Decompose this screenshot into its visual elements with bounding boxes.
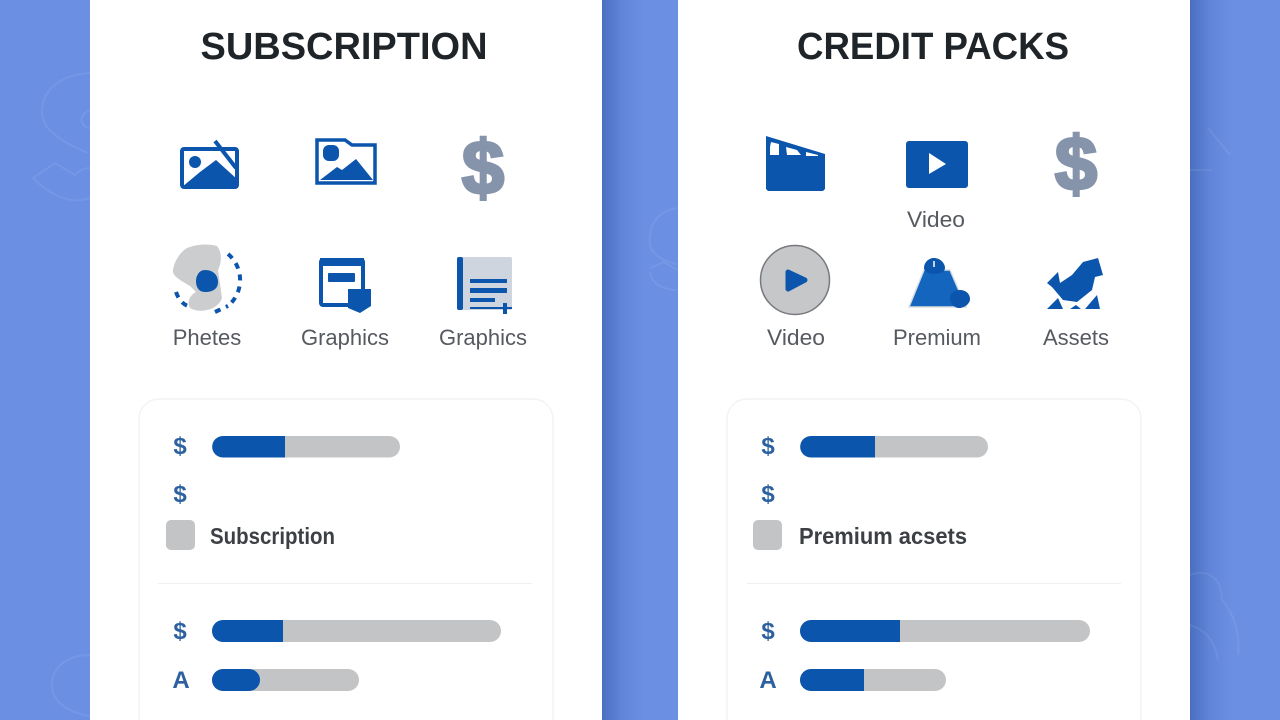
legend label: Subscription [210, 523, 335, 549]
panel: subscription [90, 0, 602, 720]
dollar marker: $ [173, 481, 187, 508]
legend label: Premium acsets [799, 523, 967, 549]
icon: premium [909, 258, 970, 308]
bar row 1: $ [761, 433, 775, 460]
icon: assets [1047, 258, 1103, 309]
bar row 3 [759, 667, 946, 694]
bar row 1 [761, 433, 988, 460]
icon: photo [182, 141, 238, 188]
bar row 3: A [172, 667, 190, 694]
label: graphics: Graphics [439, 325, 527, 350]
bar row 2: $ [761, 618, 775, 645]
icon: graphics document [457, 257, 512, 314]
bar row 1 [173, 433, 400, 460]
heading: credit packs: CREDIT PACKS [797, 26, 1069, 68]
icon: image folder [317, 140, 375, 183]
icon: clapperboard [766, 136, 825, 191]
card: usage [727, 399, 1141, 720]
label: premium: Premium [893, 325, 981, 350]
label: assets: Assets [1043, 325, 1109, 350]
bar row 2 [173, 618, 501, 645]
icon: dollar: $ [462, 126, 504, 211]
swatch [753, 520, 782, 550]
bar row 2 [761, 618, 1090, 645]
icon: video player [906, 141, 968, 188]
icon: photos dial [173, 245, 240, 312]
icon: dollar: $ [1055, 122, 1097, 207]
label: video: Video [907, 207, 965, 232]
bar row 2: $ [173, 618, 187, 645]
icon: graphics window [320, 258, 371, 313]
bar row 3: A [759, 667, 777, 694]
label: video: Video [767, 325, 825, 350]
panel: credit packs [678, 0, 1190, 720]
heading: subscription: SUBSCRIPTION [200, 26, 488, 68]
bar row 1: $ [173, 433, 187, 460]
card: usage [139, 399, 553, 720]
swatch [166, 520, 195, 550]
icon: play disc [760, 246, 830, 314]
dollar marker: $ [761, 481, 775, 508]
label: photos: Phetes [173, 325, 241, 350]
label: graphics: Graphics [301, 325, 389, 350]
bar row 3 [172, 667, 359, 694]
